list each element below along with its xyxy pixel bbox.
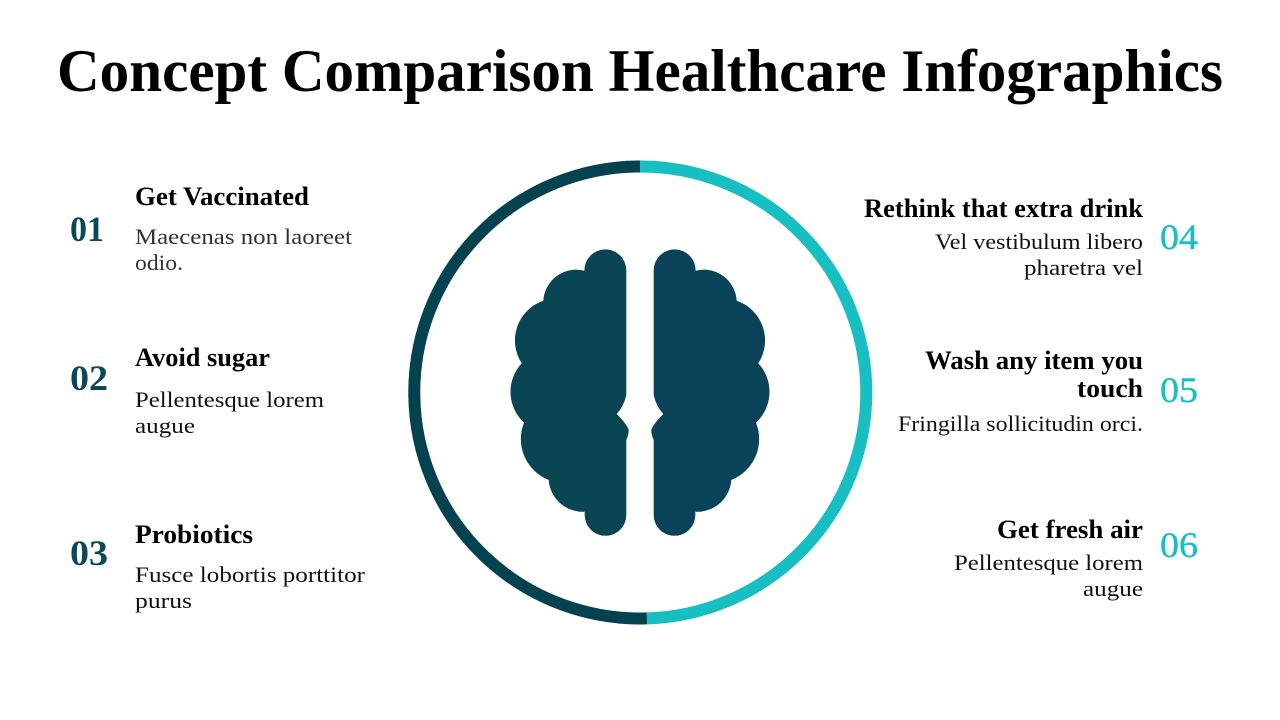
number 01: 01 [70, 209, 104, 249]
heading: touch [1077, 374, 1144, 403]
item 06 [954, 515, 1198, 601]
number 02: 02 [70, 358, 108, 398]
body text [135, 224, 353, 275]
brain left hemisphere [511, 249, 629, 536]
heading [925, 346, 1144, 403]
body text: augue [135, 413, 195, 438]
body text: Pellentesque lorem [954, 550, 1144, 575]
heading: Get fresh air [997, 515, 1143, 544]
body text: Maecenas non laoreet [135, 224, 353, 249]
item 04 [864, 194, 1198, 280]
title: Concept Comparison Healthcare Infographics [57, 38, 1223, 104]
heading: Probiotics [135, 520, 253, 549]
heading: Wash any item you [925, 346, 1143, 375]
body text: augue [1083, 576, 1143, 601]
body text [135, 562, 366, 613]
body text [954, 550, 1144, 601]
number 05: 05 [1160, 370, 1198, 410]
heading: Rethink that extra drink [864, 194, 1144, 223]
item 03 [70, 520, 366, 613]
brain right hemisphere [651, 249, 769, 536]
body text [935, 229, 1143, 280]
number 06: 06 [1160, 525, 1198, 565]
comparison ring [414, 166, 866, 618]
body text: Vel vestibulum libero [935, 229, 1143, 254]
icon: brain [511, 249, 769, 536]
heading: Get Vaccinated [135, 182, 310, 211]
ring segment: dark [414, 166, 647, 618]
body text: purus [135, 588, 192, 613]
body text [135, 387, 325, 438]
item 05 [898, 346, 1198, 436]
body text: Fusce lobortis porttitor [135, 562, 366, 587]
heading: Avoid sugar [135, 343, 270, 372]
body text: Fringilla sollicitudin orci. [898, 411, 1143, 436]
body text: pharetra vel [1024, 255, 1143, 280]
number 03: 03 [70, 533, 108, 573]
body text: Pellentesque lorem [135, 387, 325, 412]
item 01 [70, 182, 353, 275]
ring segment: teal [640, 166, 866, 618]
item 02 [70, 343, 325, 438]
body text: odio. [135, 250, 183, 275]
number 04: 04 [1160, 217, 1198, 257]
